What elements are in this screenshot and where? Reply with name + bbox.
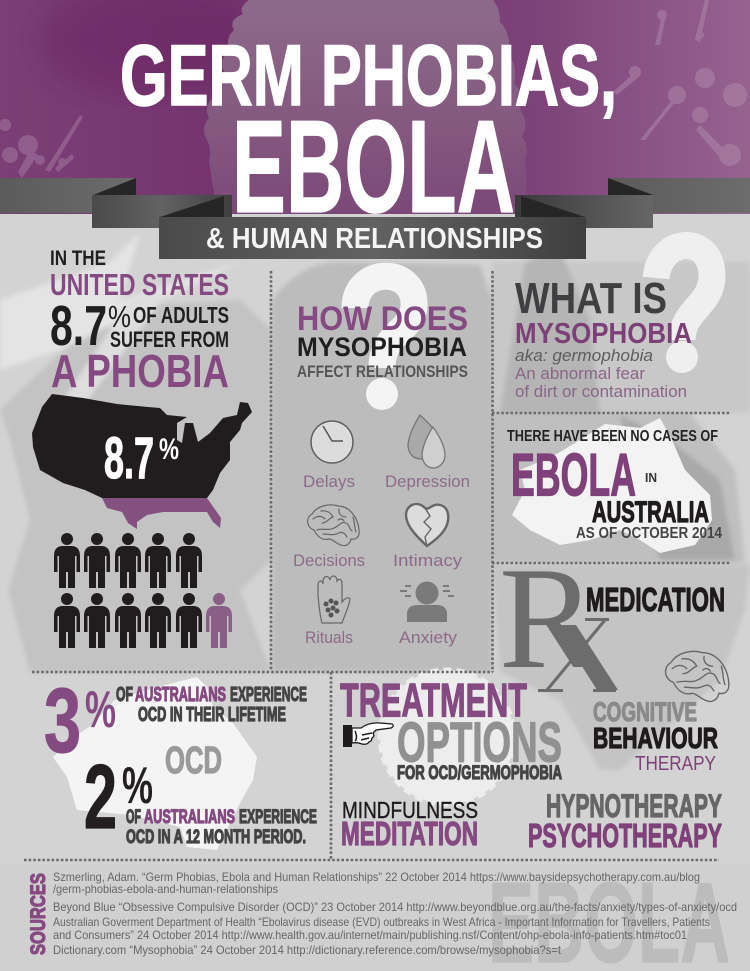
source 3 continued: and Consumers” 24 October 2014 http://www.health.gov.au/internet/main/publishing.nsf/Content/ohp-ebola-info-patients.htm#toc01 bbox=[53, 928, 687, 942]
ebola: EBOLA bbox=[511, 442, 636, 508]
label: depression: Depression bbox=[385, 472, 470, 491]
as of october 2014: AS OF OCTOBER 2014 bbox=[576, 525, 722, 542]
icon: pointing hand bbox=[343, 723, 393, 747]
therapy: THERAPY bbox=[635, 753, 716, 775]
white question mark centre bbox=[355, 276, 414, 410]
of adults: OF ADULTS bbox=[133, 302, 229, 328]
a phobia: A PHOBIA bbox=[51, 345, 229, 397]
dotted dividers bbox=[24, 271, 731, 860]
title: ebola: EBOLA bbox=[232, 93, 515, 240]
definition line one: An abnormal fear bbox=[515, 364, 645, 383]
twelve month line: OCD IN A 12 MONTH PERIOD. bbox=[126, 827, 306, 848]
icon: brain outline bbox=[666, 651, 729, 701]
source 1 continued: /germ-phobias-ebola-and-human-relationships bbox=[53, 882, 278, 896]
percent sign: % bbox=[108, 299, 131, 334]
stat 8.7: 8.7 bbox=[50, 294, 107, 358]
panel: no ebola in australia bbox=[507, 428, 722, 542]
panel: how does mysophobia affect relationships bbox=[293, 300, 470, 647]
panel: treatment options bbox=[340, 674, 562, 852]
header purple background bbox=[0, 0, 750, 214]
experience 2: EXPERIENCE bbox=[239, 807, 317, 828]
subtitle: & HUMAN RELATIONSHIPS bbox=[206, 223, 543, 255]
ebola virus silhouette bbox=[204, 0, 527, 214]
of australians 2: OF bbox=[126, 807, 141, 828]
suffer from: SUFFER FROM bbox=[110, 327, 229, 352]
panel: medication and therapy bbox=[499, 537, 729, 854]
heading: mysophobia: MYSOPHOBIA bbox=[515, 318, 692, 350]
panel: sources bbox=[27, 870, 737, 957]
panel: us phobia statistics bbox=[32, 247, 252, 648]
white question mark right bbox=[656, 245, 712, 373]
panel: ocd statistics bbox=[44, 670, 317, 848]
icon: clock bbox=[311, 421, 353, 463]
icon: broken heart bbox=[406, 504, 448, 546]
mindfulness: MINDFULNESS bbox=[342, 797, 478, 823]
aka germophobia: aka: germophobia bbox=[515, 346, 653, 365]
icon: anxious person bbox=[400, 582, 454, 622]
cognitive: COGNITIVE bbox=[593, 697, 697, 727]
stat 2: 2 bbox=[84, 747, 117, 848]
source 4: Dictionary.com “Mysophobia” 24 October 2014 http://dictionary.reference.com/browse/mysophobia?s=t bbox=[53, 943, 562, 957]
heading: mysophobia: MYSOPHOBIA bbox=[297, 332, 467, 362]
source 1: Szmerling, Adam. “Germ Phobias, Ebola and Human Relationships” 22 October 2014 https://www.baysidepsychotherapy.com.au/blog bbox=[53, 870, 700, 884]
heading: how does: HOW DOES bbox=[297, 300, 468, 338]
australians 2: AUSTRALIANS bbox=[144, 807, 235, 828]
stat 2 percent: % bbox=[122, 757, 153, 815]
meditation: MEDITATION bbox=[341, 815, 478, 852]
treatment: TREATMENT bbox=[340, 674, 527, 726]
stat 3: 3 bbox=[44, 670, 81, 772]
label: delays: Delays bbox=[303, 472, 355, 491]
icon: hand with germs bbox=[318, 576, 350, 623]
label: decisions: Decisions bbox=[293, 551, 365, 570]
ocd label: OCD bbox=[165, 740, 222, 782]
map label percent: % bbox=[159, 433, 179, 466]
australia silhouette lower left bbox=[53, 677, 257, 850]
sources heading: SOURCES bbox=[27, 873, 50, 955]
map label: 8.7 bbox=[104, 426, 154, 491]
options: OPTIONS bbox=[397, 710, 562, 774]
icon: tear drops bbox=[408, 415, 445, 468]
in: IN bbox=[645, 470, 657, 485]
heading: what is: WHAT IS bbox=[515, 274, 667, 323]
heading: united states: UNITED STATES bbox=[50, 267, 229, 302]
for ocd germophobia: FOR OCD/GERMOPHOBIA bbox=[397, 763, 562, 784]
of australians 1: OF bbox=[116, 684, 133, 706]
rx symbol: R bbox=[499, 537, 597, 699]
ribbon banner bbox=[0, 178, 750, 259]
stat 3 percent: % bbox=[85, 681, 116, 739]
experience 1: EXPERIENCE bbox=[230, 684, 307, 706]
starburst behind treatment options bbox=[380, 670, 514, 804]
australia silhouette upper right bbox=[512, 418, 712, 553]
splatter decoration left bbox=[0, 115, 83, 178]
australians 1: AUSTRALIANS bbox=[135, 684, 226, 706]
label: anxiety: Anxiety bbox=[399, 628, 458, 647]
splatter decoration right bbox=[613, 0, 747, 166]
us map bbox=[32, 394, 252, 529]
panel: what is mysophobia bbox=[515, 274, 692, 401]
heading: affect relationships: AFFECT RELATIONSHIPS bbox=[297, 362, 468, 381]
heading: in the: IN THE bbox=[50, 247, 106, 270]
icon: brain bbox=[308, 505, 359, 546]
lifetime line: OCD IN THEIR LIFETIME bbox=[138, 704, 286, 726]
people pictogram bbox=[54, 533, 232, 648]
label: intimacy: Intimacy bbox=[393, 551, 463, 570]
definition line two: of dirt or contamination bbox=[515, 382, 687, 401]
label: rituals: Rituals bbox=[305, 628, 353, 647]
